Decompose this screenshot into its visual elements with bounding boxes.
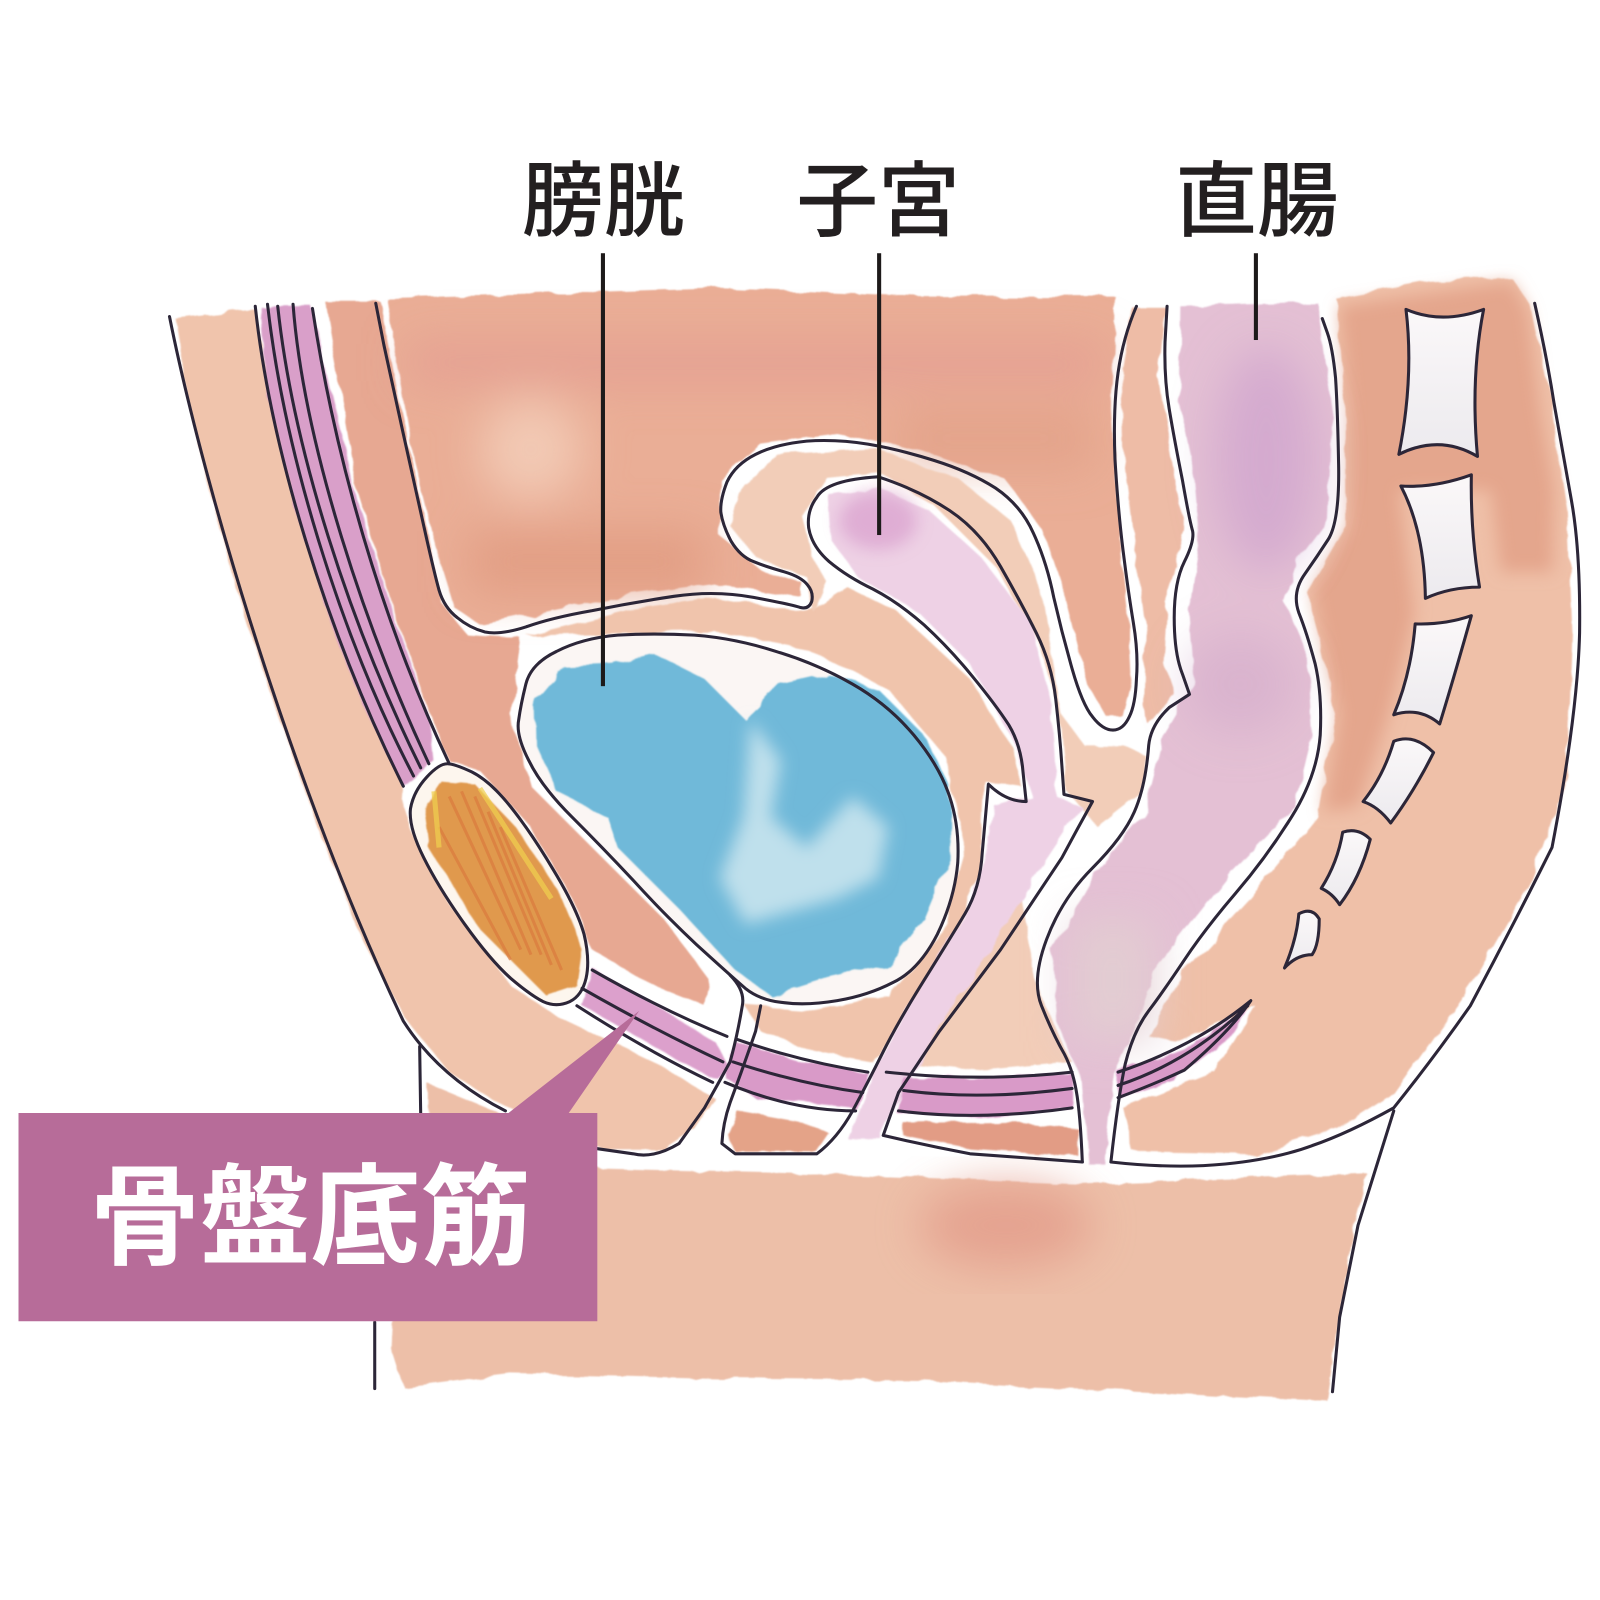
sacral vertebrae xyxy=(1284,309,1484,968)
shading: abdomen bands xyxy=(408,342,1103,592)
outline: peritoneum xyxy=(376,303,1137,730)
skin: front belly wall xyxy=(176,309,715,1149)
shading: uterus dark xyxy=(839,492,917,549)
pelvic floor muscle xyxy=(582,970,1248,1117)
outline: rectum right wall and back xyxy=(1111,303,1580,1166)
skin: back and sacrum zone xyxy=(1123,278,1572,1154)
bladder white fill xyxy=(518,634,958,1004)
shading: back darker band xyxy=(1313,282,1554,812)
label: bladder xyxy=(522,157,685,686)
skin: column beside rectum xyxy=(1121,306,1184,725)
callout: pelvic floor muscle xyxy=(18,1011,639,1321)
pubic bone xyxy=(410,764,588,1005)
outline: thigh lines xyxy=(375,1047,1394,1392)
illustration: pelvic cross-section xyxy=(169,278,1580,1401)
ink outlines xyxy=(169,303,1580,1392)
shading: rectum purple xyxy=(1072,347,1317,1041)
label: rectum: 直腸 xyxy=(1175,157,1339,248)
label: uterus: 子宮 xyxy=(796,157,960,248)
outline: bladder xyxy=(518,634,958,1004)
label: uterus xyxy=(796,157,960,535)
bladder light patches xyxy=(720,720,888,924)
skin: between uterus and bladder xyxy=(526,587,1021,1062)
skin: upper abdomen xyxy=(386,288,1131,715)
muscle: lower dark skin patches xyxy=(727,1111,1078,1156)
outline: rectus muscle lines xyxy=(255,304,449,786)
label: rectum xyxy=(1175,157,1339,340)
outline: rectum left wall xyxy=(1037,306,1193,1162)
skin: thigh block xyxy=(391,1084,1368,1401)
rectus muscle fill xyxy=(260,306,434,786)
rectum fill xyxy=(1052,302,1331,1164)
outline: urethra xyxy=(597,975,743,1155)
outline: pubic bone xyxy=(410,764,588,1005)
callout: pelvic floor muscle: 骨盤底筋 xyxy=(90,1157,531,1280)
outline: uterus right wall xyxy=(878,477,1093,1162)
shading: thigh dark spot xyxy=(919,1182,1093,1268)
bladder blue fill xyxy=(535,653,950,996)
skin: abdomen strip beside muscle xyxy=(325,301,710,1006)
label: bladder: 膀胱 xyxy=(522,157,685,248)
outline: front body wall xyxy=(169,317,505,1111)
skin: peritoneal fold xyxy=(730,449,1146,827)
skin: lower middle xyxy=(899,899,1072,1070)
outline: uterus and vagina xyxy=(722,477,1026,1154)
uterus fill xyxy=(829,488,1082,1138)
outline: pelvic floor xyxy=(577,970,1251,1115)
